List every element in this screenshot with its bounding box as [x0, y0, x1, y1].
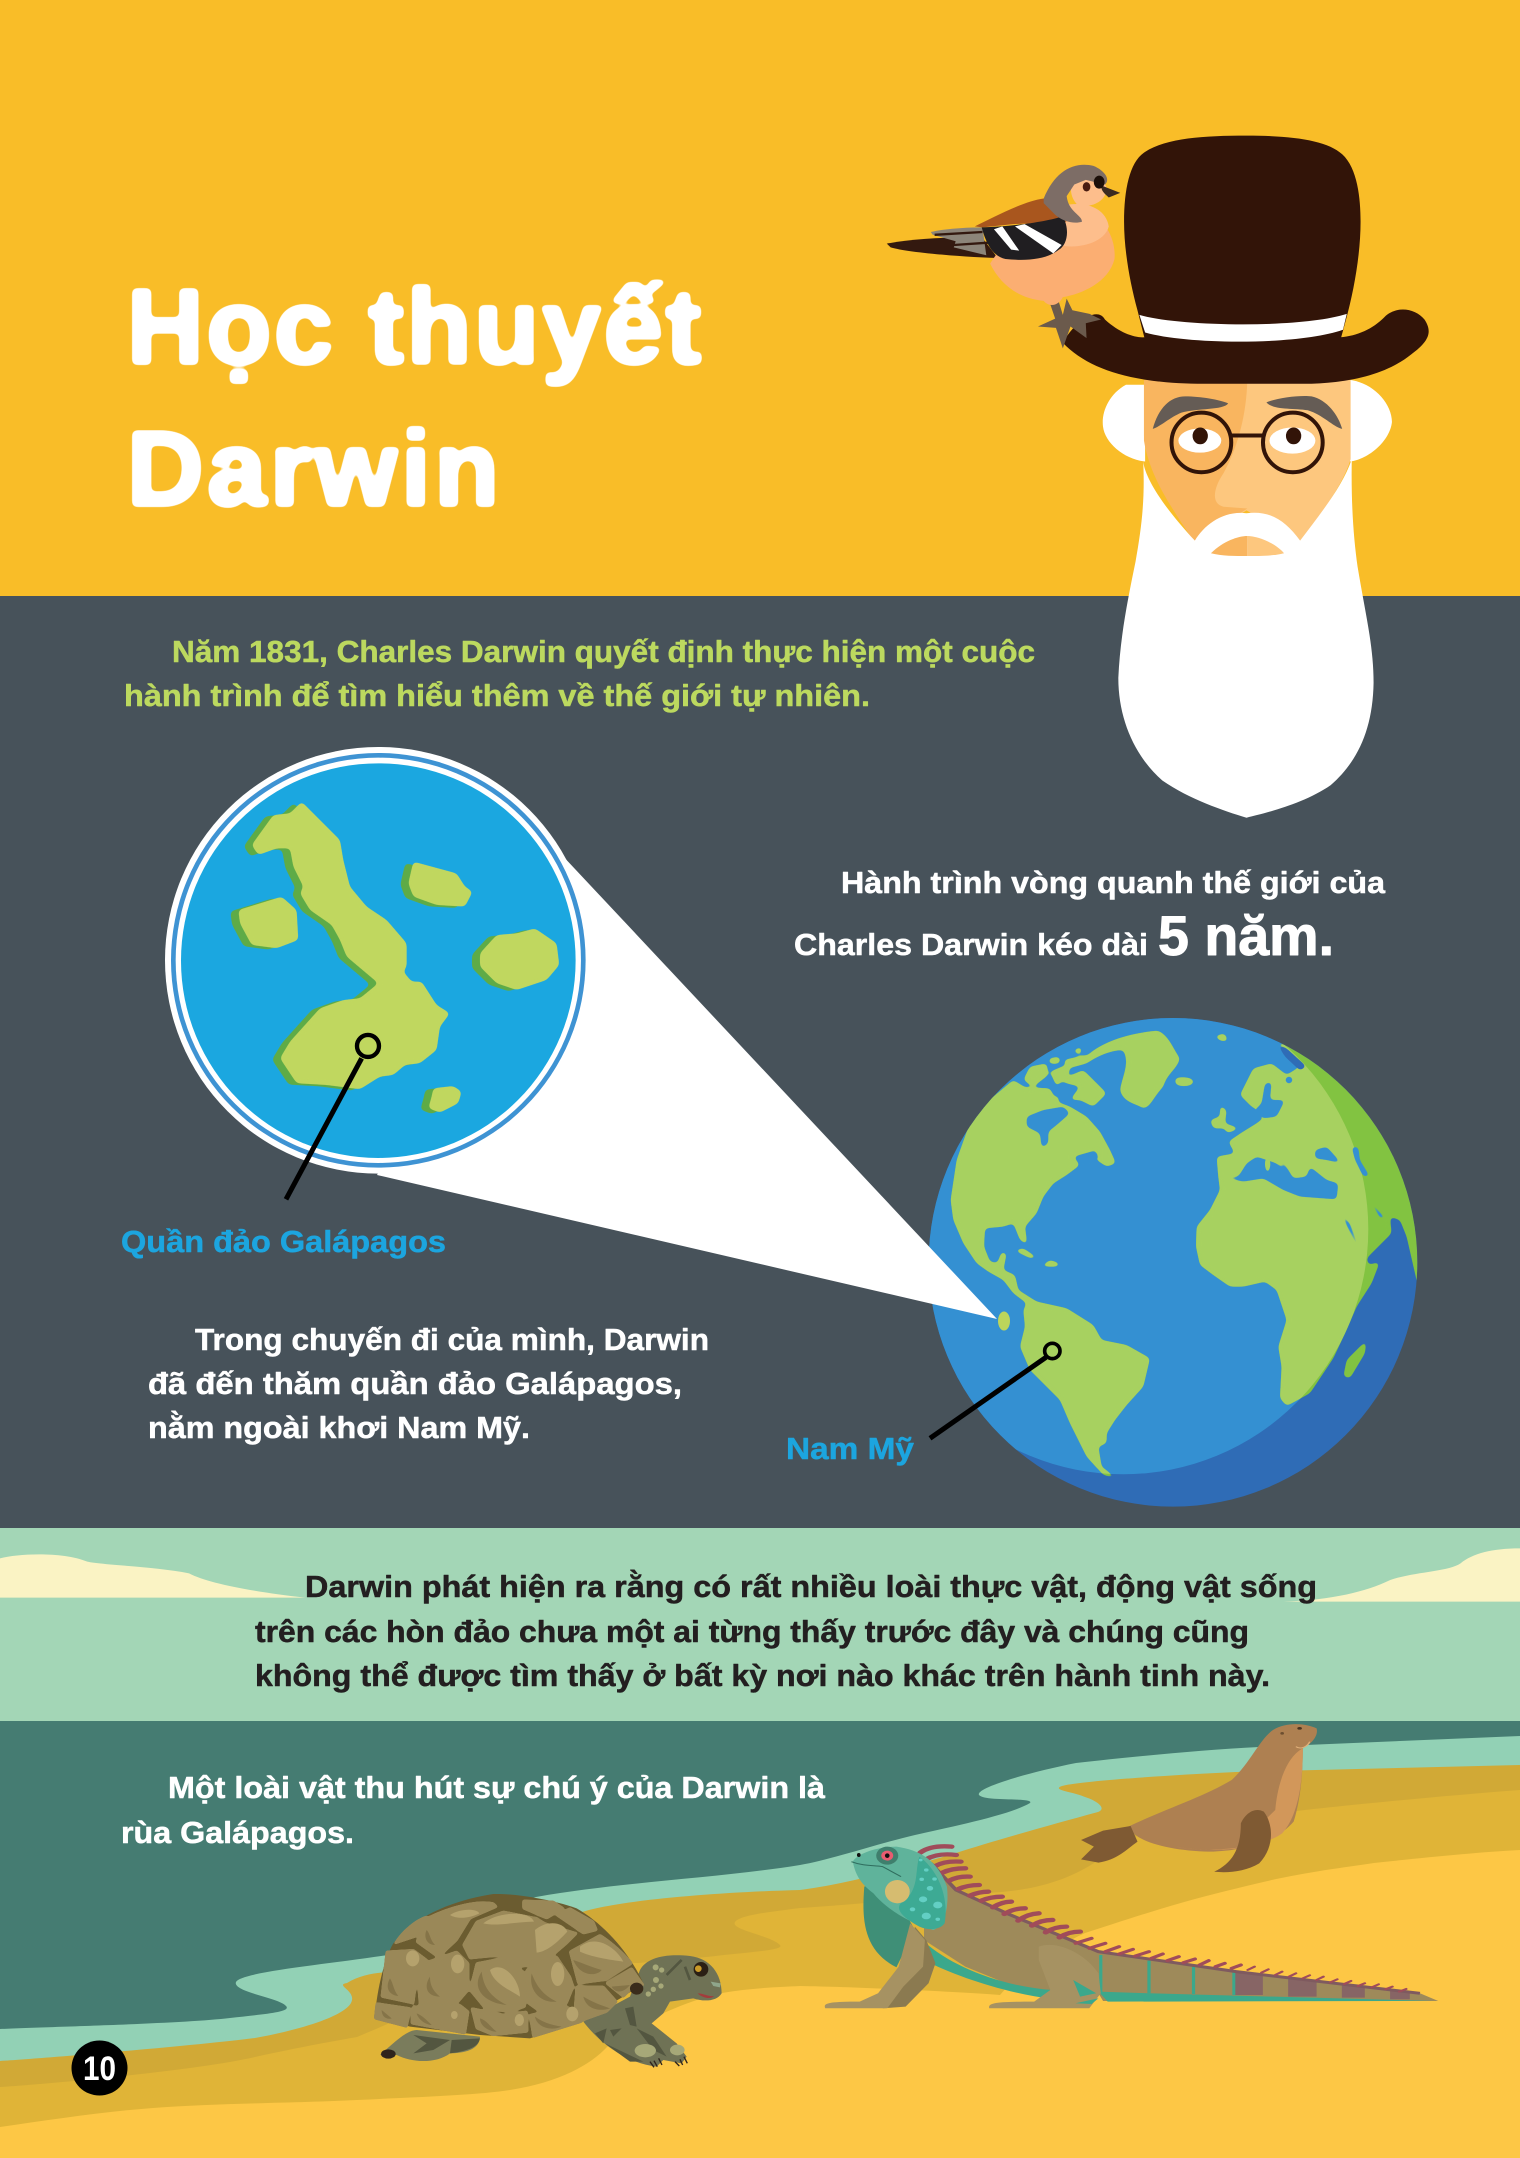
hair [1103, 380, 1392, 462]
mouth [1211, 536, 1284, 556]
spikes [920, 1846, 1406, 1992]
spine [931, 1863, 1420, 1993]
journey text: Charles Darwin kéo dài [794, 928, 1148, 962]
cloud left [0, 1554, 305, 1598]
cloud right [1284, 1548, 1520, 1602]
title: Darwin [127, 410, 499, 528]
illustration: Darwin with hat and beard [887, 136, 1429, 818]
galapagos dot on globe [998, 1312, 1010, 1330]
page number [72, 2040, 128, 2096]
head [851, 1847, 948, 1930]
title [127, 268, 701, 528]
tail bands [1101, 1955, 1410, 1999]
page number: 10 [83, 2050, 116, 2088]
text: discovery [255, 1568, 1317, 1693]
eyebrows [1153, 396, 1342, 429]
background: yellow header [0, 0, 1520, 596]
shell base and grooves [375, 1894, 643, 2038]
text: Galápagos visit [148, 1323, 709, 1445]
background: light green sky band [0, 1528, 1520, 1721]
eyes and glasses [1172, 413, 1323, 472]
intro text: hành trình để tìm hiểu thêm về thế giới tự nhiên. [124, 679, 870, 713]
text: Galápagos visit: nằm ngoài khơi Nam Mỹ. [148, 1409, 530, 1445]
illustration: iguana [825, 1846, 1438, 2008]
text: discovery: trên các hòn đảo chưa một ai từng thấy trước đây và chúng cũng [255, 1615, 1249, 1649]
background: dark grey panel [0, 596, 1520, 1528]
label: Nam Mỹ: Nam Mỹ [786, 1431, 915, 1466]
text: tortoise: Một loài vật thu hút sự chú ý của Darwin là [168, 1771, 826, 1805]
front leg and neck [583, 1955, 722, 2067]
beam from globe to magnifier [377, 853, 997, 1319]
front leg [825, 1923, 935, 2008]
shell highlights [406, 1910, 623, 2026]
shell shadows [382, 1930, 630, 2032]
text: tortoise: rùa Galápagos. [121, 1816, 354, 1850]
beach scene background [0, 1721, 1520, 2158]
back leg [989, 1945, 1101, 2008]
label: Quần đảo Galápagos: Quần đảo Galápagos [121, 1224, 446, 1259]
belly [924, 1942, 1434, 2002]
text: discovery: Darwin phát hiện ra rằng có rất nhiều loài thực vật, động vật sống [305, 1568, 1317, 1604]
text: discovery: không thể được tìm thấy ở bất kỳ nơi nào khác trên hành tinh này. [255, 1659, 1270, 1693]
bird [887, 165, 1120, 348]
pointer: Nam Mỹ [930, 1343, 1060, 1438]
illustration: sea lion [1081, 1724, 1317, 1872]
journey text [794, 866, 1386, 967]
dewlap [863, 1880, 915, 1967]
back leg [380, 2030, 480, 2061]
text: tortoise [121, 1771, 826, 1850]
journey text: 5 năm. [1158, 904, 1334, 967]
text: Galápagos visit: Trong chuyến đi của mình, Darwin [195, 1323, 709, 1357]
hat [1063, 136, 1429, 384]
title: Học thuyết [127, 268, 701, 386]
illustration: globe [929, 1018, 1418, 1507]
beard [1118, 459, 1374, 818]
body and tail [924, 1857, 1438, 2001]
illustration: tortoise [375, 1894, 722, 2067]
illustration: magnifier with Galápagos map [165, 747, 592, 1199]
islands [230, 802, 559, 1114]
journey text: Hành trình vòng quanh thế giới của [841, 866, 1386, 900]
face [1144, 380, 1351, 543]
intro text: Năm 1831, Charles Darwin quyết định thực hiện một cuộc [172, 635, 1035, 669]
intro text [124, 635, 1035, 713]
shell plates [375, 1901, 643, 2037]
text: Galápagos visit: đã đến thăm quần đảo Galápagos, [148, 1367, 682, 1401]
pointer: Galápagos [286, 1035, 379, 1199]
